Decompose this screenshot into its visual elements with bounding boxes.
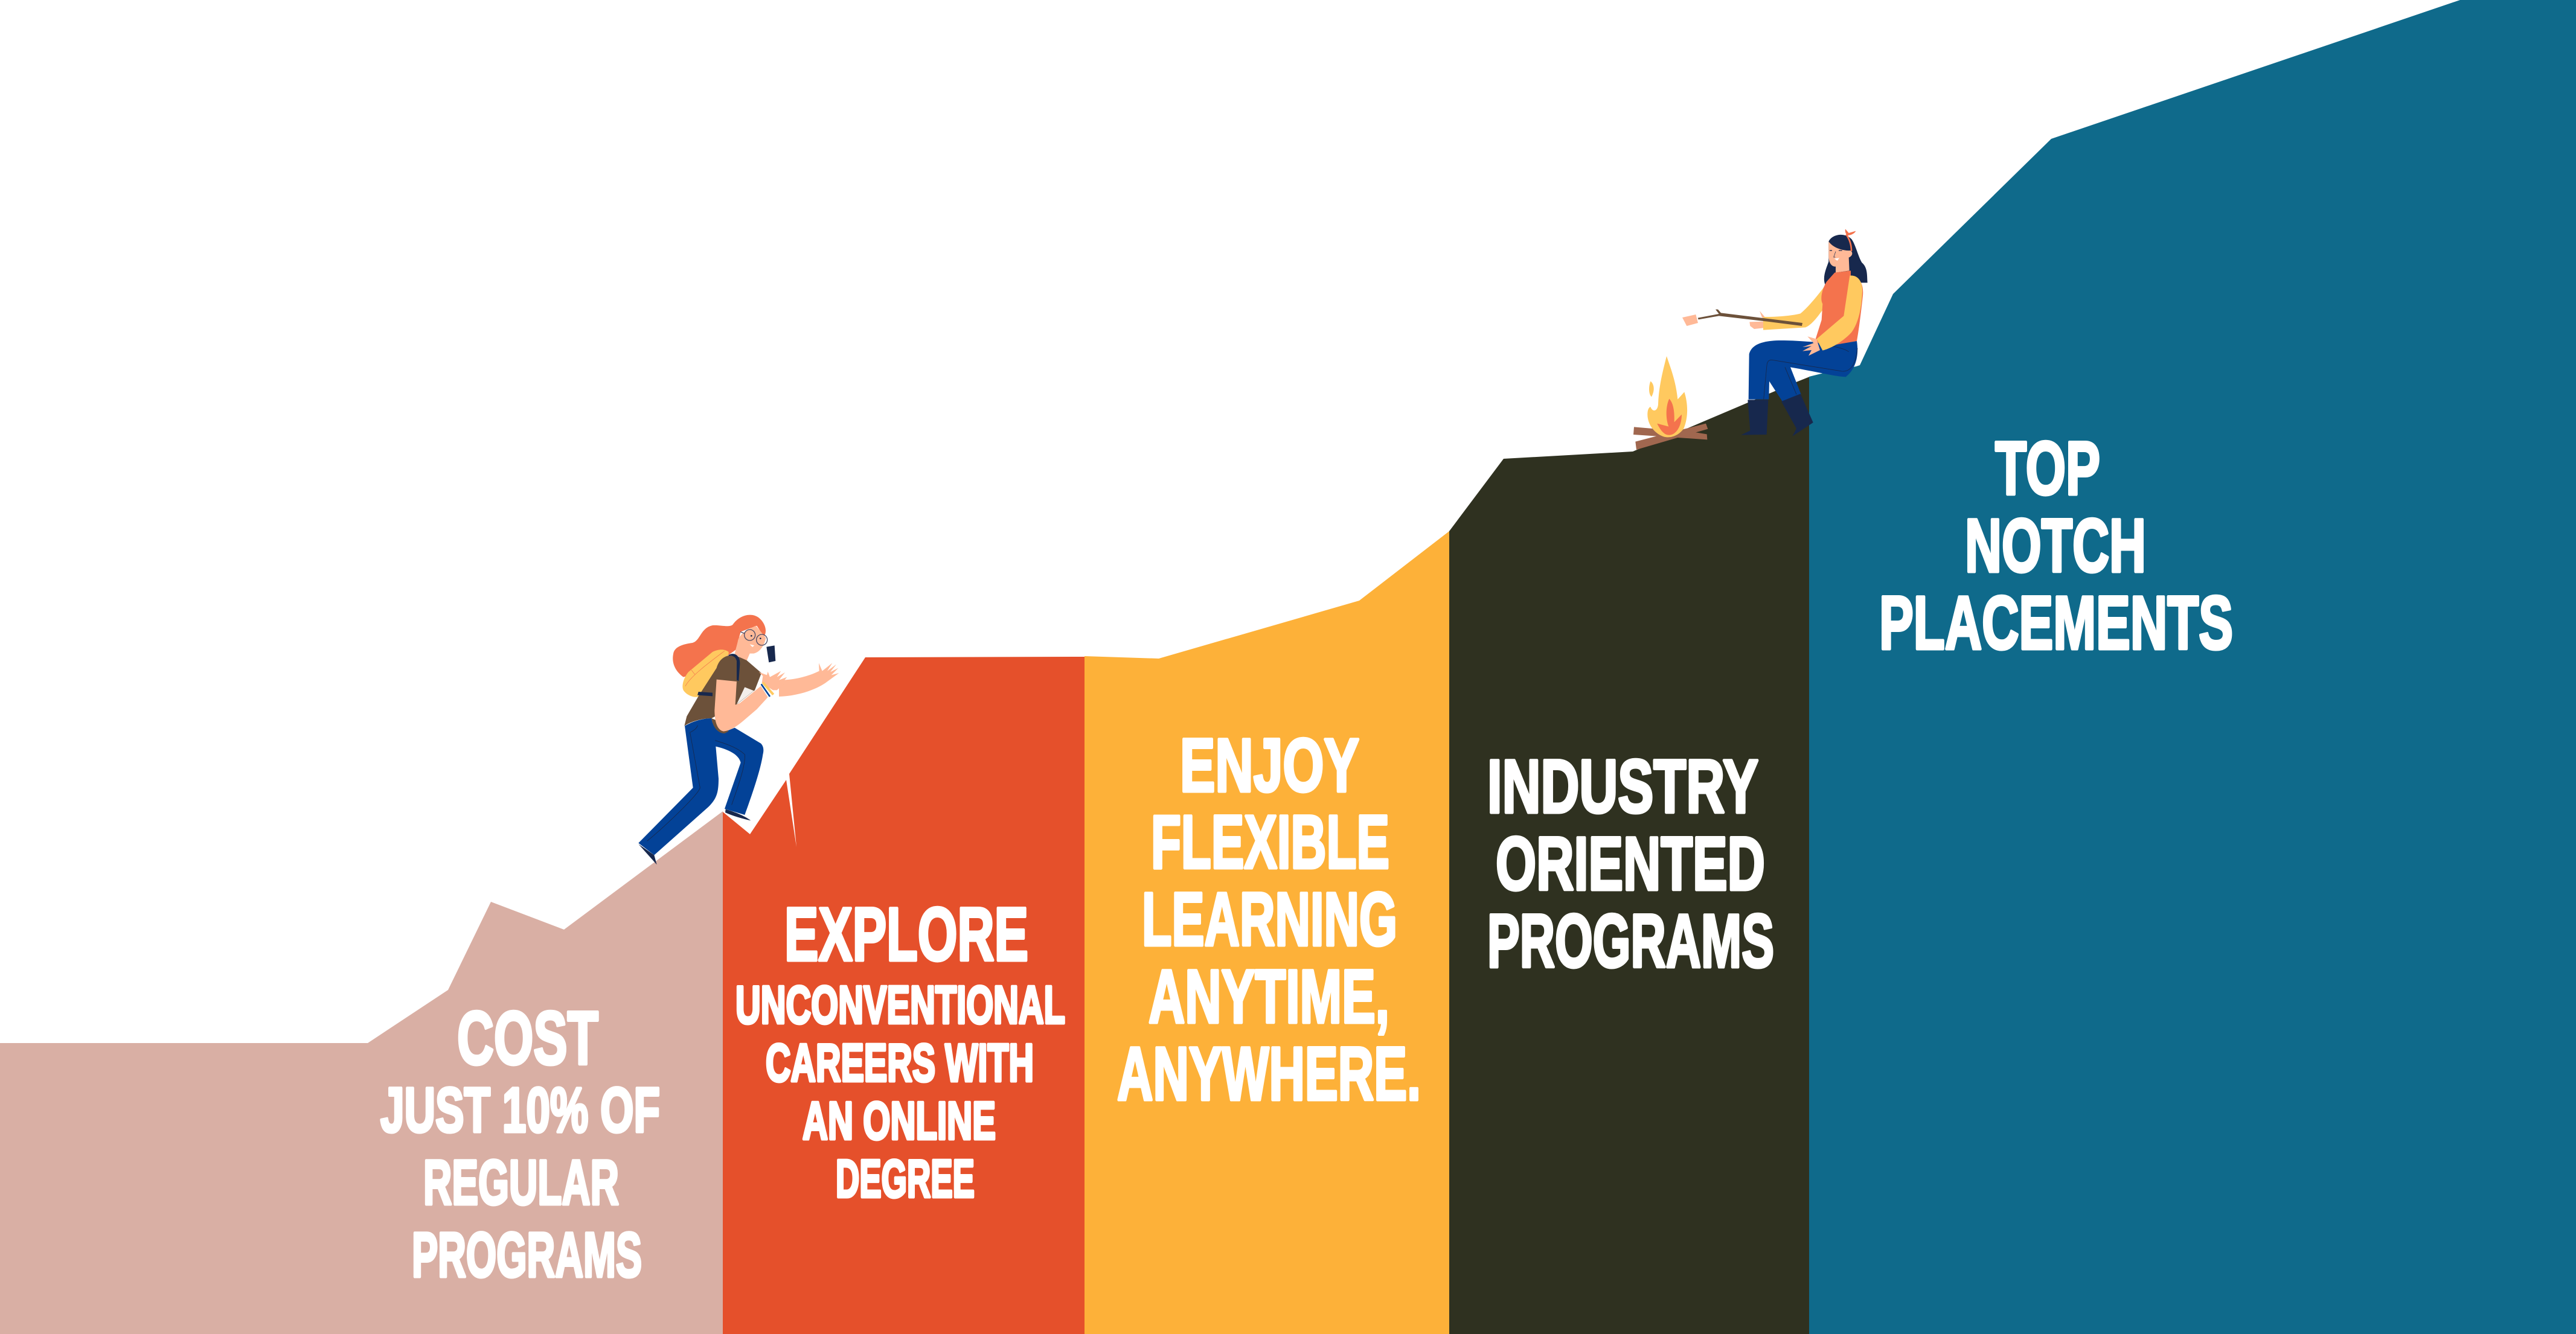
- panel: cost: [0, 811, 723, 1334]
- text block: enjoy flexible learning: ANYWHERE.: [1117, 1032, 1421, 1116]
- yellow mountain step: [1085, 531, 1449, 1334]
- blue mountain step: [1809, 0, 2576, 1334]
- text block: unconventional careers: [735, 975, 1065, 1208]
- panel: explore: [723, 657, 1085, 1334]
- text block: industry oriented programs: PROGRAMS: [1487, 899, 1774, 983]
- text block: enjoy flexible learning: ENJOY: [1180, 724, 1359, 808]
- text block: just 10% of regular programs: PROGRAMS: [412, 1220, 642, 1291]
- text block: just 10% of regular programs: REGULAR: [423, 1147, 619, 1218]
- pink mountain step: [0, 811, 723, 1334]
- text block: enjoy flexible learning: FLEXIBLE: [1151, 800, 1389, 884]
- text block: enjoy flexible learning: [1117, 724, 1421, 1116]
- text block: unconventional careers: CAREERS WITH: [766, 1033, 1034, 1093]
- text block: just 10% of regular programs: JUST 10% OF: [380, 1075, 660, 1146]
- text block: industry oriented programs: INDUSTRY: [1487, 745, 1758, 829]
- heading: cost: COST: [457, 997, 598, 1080]
- text block: top notch placements: [1879, 427, 2233, 665]
- text block: industry oriented programs: ORIENTED: [1496, 822, 1765, 906]
- heading: explore: EXPLORE: [784, 893, 1028, 977]
- text block: industry oriented programs: [1487, 745, 1774, 983]
- text block: unconventional careers: DEGREE: [836, 1149, 975, 1208]
- text block: unconventional careers: AN ONLINE: [803, 1091, 996, 1150]
- icon: climbing woman: [638, 615, 839, 864]
- dark mountain step: [1449, 377, 1810, 1334]
- icon: campfire: [1633, 356, 1708, 450]
- text block: just 10% of regular programs: [380, 1075, 660, 1291]
- text block: top notch placements: NOTCH: [1965, 504, 2146, 588]
- text block: enjoy flexible learning: LEARNING: [1142, 878, 1397, 962]
- text block: unconventional careers: UNCONVENTIONAL: [735, 975, 1065, 1035]
- panel: industry oriented programs: [1449, 377, 1810, 1334]
- text block: top notch placements: PLACEMENTS: [1879, 581, 2233, 665]
- red mountain step with crack: [723, 657, 1085, 1334]
- text block: top notch placements: TOP: [1995, 427, 2100, 511]
- panel: flexible learning: [1085, 531, 1449, 1334]
- panel: top notch placements: [1809, 0, 2576, 1334]
- text block: enjoy flexible learning: ANYTIME,: [1149, 955, 1389, 1039]
- icon: woman sitting by fire: [1682, 229, 1868, 436]
